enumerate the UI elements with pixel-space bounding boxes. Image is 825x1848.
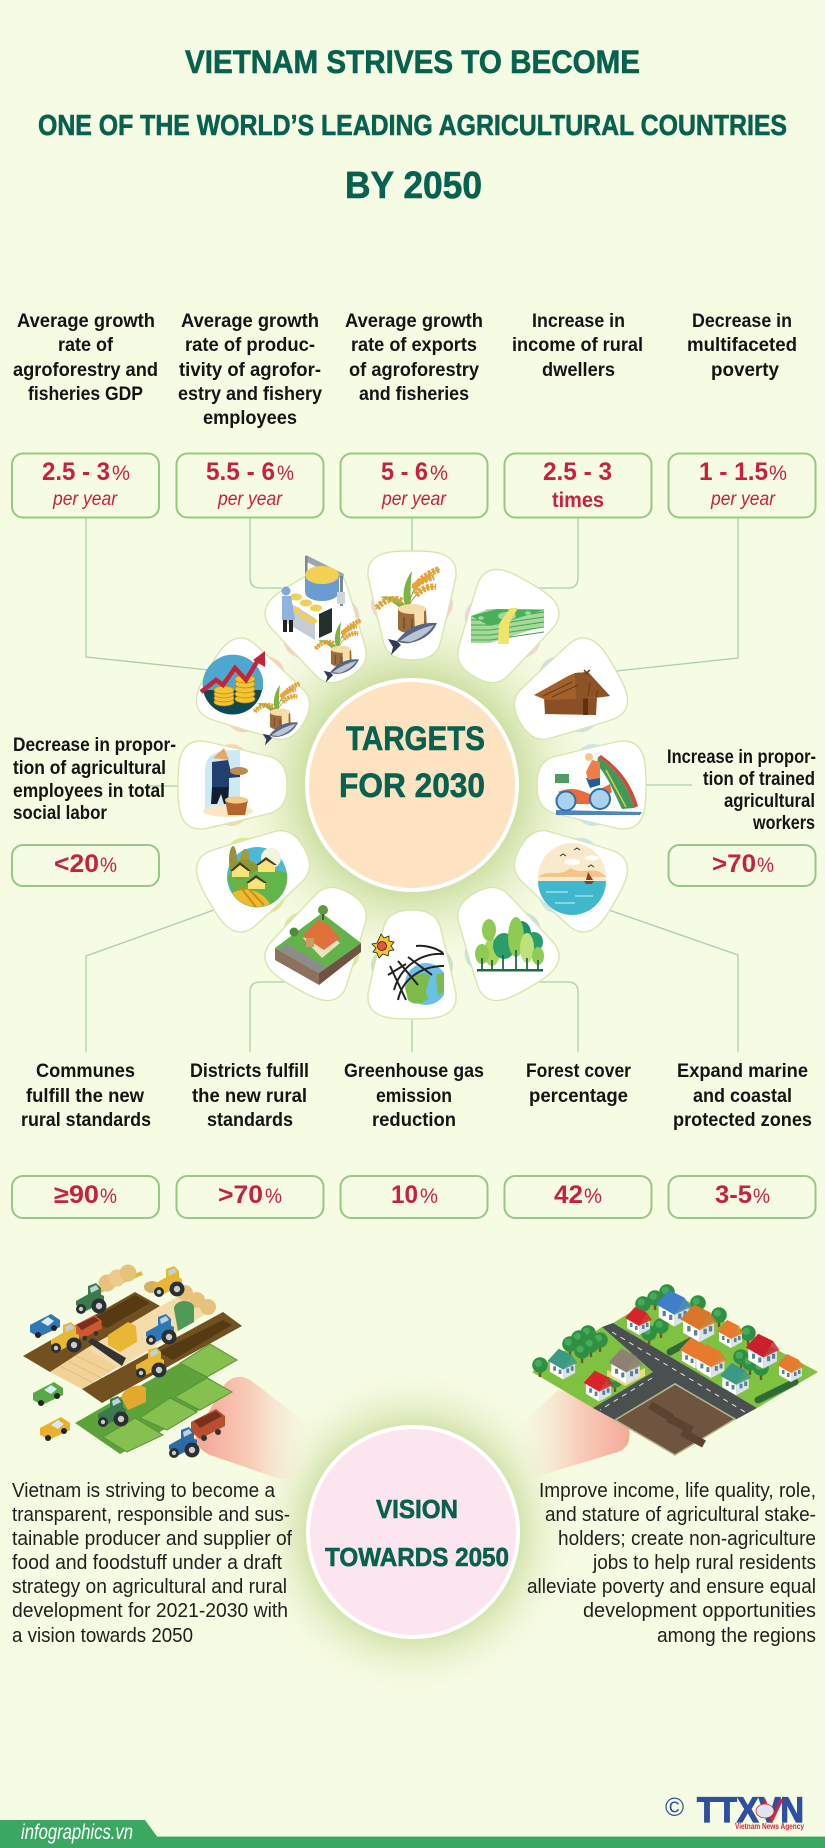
text block: vision left: food and foodstuff under a draft bbox=[12, 1552, 282, 1574]
title: VIETNAM STRIVES TO BECOME bbox=[185, 44, 640, 80]
target 2: productivity growth: per year bbox=[217, 489, 283, 510]
target 4: rural income: dwellers bbox=[542, 359, 615, 381]
footer band bbox=[0, 1820, 825, 1848]
target 5: poverty: Decrease in bbox=[692, 310, 792, 332]
icon: sea and coast bbox=[538, 843, 606, 915]
target 8: communes: ≥90 bbox=[54, 1181, 99, 1209]
target 6: agricultural employees share: tion of agricultural bbox=[13, 757, 166, 779]
icon: motorbike with woven fan bbox=[555, 753, 642, 815]
target 1: GDP growth: per year bbox=[52, 489, 118, 510]
text block: vision right: alleviate poverty and ensure equal bbox=[527, 1576, 816, 1598]
target 9: districts: Districts fulfill bbox=[190, 1060, 309, 1082]
target 11: forest cover: % bbox=[584, 1185, 602, 1208]
target 8: communes: Communes bbox=[36, 1060, 135, 1082]
text block: vision left: a vision towards 2050 bbox=[12, 1625, 193, 1647]
target 10: greenhouse gas: emission bbox=[376, 1085, 452, 1107]
logo: TTXVN Vietnam News Agency: Vietnam News Agency bbox=[735, 1821, 804, 1831]
target 2: productivity growth: 5.5 - 6 bbox=[206, 458, 275, 486]
text block: vision right: jobs to help rural residents bbox=[592, 1552, 816, 1574]
target 10: greenhouse gas: 10 bbox=[391, 1181, 418, 1209]
title bbox=[38, 44, 787, 207]
target 5: poverty: per year bbox=[710, 489, 776, 510]
icon: thatched hut bbox=[534, 670, 610, 715]
icon: forest bbox=[475, 917, 544, 972]
text block: vision right: holders; create non-agriculture bbox=[558, 1528, 816, 1550]
target 2: productivity growth: rate of produc- bbox=[185, 334, 315, 356]
arrow: peach beam right bbox=[518, 1390, 630, 1478]
target 9: districts: standards bbox=[207, 1109, 293, 1131]
target 11: forest cover: percentage bbox=[529, 1085, 628, 1107]
target 3: exports growth: of agroforestry bbox=[349, 359, 479, 381]
text block: vision left: tainable producer and supplier of bbox=[12, 1528, 292, 1550]
footer band: infographics.vn bbox=[21, 1821, 133, 1844]
target 10: greenhouse gas: % bbox=[420, 1185, 438, 1208]
target 4: rural income: 2.5 - 3 bbox=[543, 458, 612, 486]
target 6: agricultural employees share: employees in total bbox=[13, 780, 165, 802]
target 7: trained workers: % bbox=[757, 854, 774, 877]
icon: greenhouse gas globe bbox=[372, 934, 447, 1005]
target 3: exports growth: 5 - 6 bbox=[381, 458, 428, 486]
target 4: rural income: income of rural bbox=[512, 334, 643, 356]
text block: vision right bbox=[527, 1480, 816, 1647]
centre glow bbox=[222, 595, 602, 975]
target 3: exports growth: and fisheries bbox=[359, 383, 469, 405]
target 8: communes bbox=[12, 1060, 159, 1218]
target 3: exports growth: % bbox=[430, 462, 448, 485]
target 3: exports growth: Average growth bbox=[345, 310, 483, 332]
illustration: rural town bbox=[532, 1284, 818, 1455]
target 2: productivity growth: tivity of agrofor- bbox=[179, 359, 321, 381]
text block: vision right: Improve income, life quality, role, bbox=[539, 1480, 816, 1502]
target 5: poverty: multifaceted bbox=[687, 334, 797, 356]
target 4: rural income: Increase in bbox=[532, 310, 625, 332]
target 1: GDP growth bbox=[12, 310, 159, 518]
target 12: marine zones: Expand marine bbox=[677, 1060, 808, 1082]
target 5: poverty: % bbox=[769, 462, 787, 485]
target 5: poverty: poverty bbox=[711, 359, 779, 381]
target 12: marine zones: 3-5 bbox=[715, 1181, 752, 1209]
icon: farmer winnowing rice bbox=[203, 748, 253, 817]
target 4: rural income: times bbox=[552, 489, 604, 512]
target 6: agricultural employees share: Decrease in propor- bbox=[13, 734, 176, 756]
target 10: greenhouse gas: Greenhouse gas bbox=[344, 1060, 484, 1082]
target 8: communes: fulfill the new bbox=[26, 1085, 145, 1107]
target 5: poverty: 1 - 1.5 bbox=[699, 458, 768, 486]
icon: growth chart with coins and rice bbox=[201, 651, 300, 745]
panel: targets for 2030 bbox=[307, 680, 517, 890]
target 1: GDP growth: % bbox=[112, 462, 130, 485]
illustration: farm fields with machinery bbox=[23, 1264, 242, 1458]
connector lines bbox=[86, 518, 738, 1052]
target 1: GDP growth: fisheries GDP bbox=[28, 383, 143, 405]
panel: targets for 2030: FOR 2030 bbox=[339, 767, 485, 805]
text block: vision right: and stature of agricultural stake- bbox=[545, 1504, 816, 1526]
target 6: agricultural employees share bbox=[12, 734, 176, 886]
target 7: trained workers bbox=[667, 746, 816, 886]
target 9: districts: the new rural bbox=[192, 1085, 307, 1107]
text block: vision right: development opportunities bbox=[583, 1600, 816, 1622]
target 6: agricultural employees share: social labor bbox=[13, 802, 107, 824]
title: BY 2050 bbox=[345, 165, 482, 207]
panel: vision towards 2050: VISION bbox=[376, 1494, 458, 1524]
target 12: marine zones: % bbox=[753, 1185, 770, 1208]
target 5: poverty bbox=[668, 310, 816, 518]
target 3: exports growth: rate of exports bbox=[351, 334, 477, 356]
text block: vision right: among the regions bbox=[657, 1625, 816, 1647]
logo: TTXVN Vietnam News Agency: TTXVN bbox=[697, 1791, 804, 1830]
vision glow bbox=[248, 1367, 578, 1697]
target 2: productivity growth: estry and fishery bbox=[178, 383, 322, 405]
icon: banknote stack bbox=[471, 608, 544, 644]
text block: vision left bbox=[12, 1480, 292, 1647]
target 3: exports growth: per year bbox=[381, 489, 447, 510]
text block: vision left: Vietnam is striving to become a bbox=[12, 1480, 276, 1502]
icon: house on plot bbox=[275, 905, 361, 985]
target 10: greenhouse gas: reduction bbox=[372, 1109, 456, 1131]
logo: TTXVN Vietnam News Agency: © bbox=[665, 1792, 684, 1822]
target 1: GDP growth: Average growth bbox=[17, 310, 155, 332]
target 2: productivity growth bbox=[176, 310, 324, 518]
target 2: productivity growth: employees bbox=[203, 407, 297, 429]
target 12: marine zones: and coastal bbox=[693, 1085, 792, 1107]
panel: vision towards 2050 bbox=[308, 1427, 518, 1637]
icon: rural village bbox=[227, 846, 287, 907]
icon: processing machine with rice bbox=[282, 555, 361, 682]
panel: targets for 2030: TARGETS bbox=[346, 720, 485, 758]
target 8: communes: % bbox=[100, 1185, 117, 1208]
target 6: agricultural employees share: % bbox=[100, 854, 117, 877]
target 1: GDP growth: rate of bbox=[58, 334, 113, 356]
target 10: greenhouse gas bbox=[340, 1060, 488, 1218]
target 12: marine zones bbox=[668, 1060, 816, 1218]
arrow: peach beam left bbox=[196, 1377, 310, 1479]
target 7: trained workers: >70 bbox=[712, 850, 756, 878]
text block: vision left: strategy on agricultural and rural bbox=[12, 1576, 287, 1598]
target 2: productivity growth: Average growth bbox=[181, 310, 319, 332]
target 6: agricultural employees share: <20 bbox=[54, 850, 99, 878]
target 11: forest cover: 42 bbox=[554, 1181, 583, 1209]
target 12: marine zones: protected zones bbox=[673, 1109, 812, 1131]
target 9: districts bbox=[176, 1060, 324, 1218]
text block: vision left: transparent, responsible and sus- bbox=[12, 1504, 290, 1526]
target 9: districts: % bbox=[265, 1185, 282, 1208]
target 9: districts: >70 bbox=[218, 1181, 263, 1209]
panel: vision towards 2050: TOWARDS 2050 bbox=[325, 1542, 509, 1572]
target 3: exports growth bbox=[340, 310, 488, 518]
text block: vision left: development for 2021-2030 with bbox=[12, 1600, 288, 1622]
target 1: GDP growth: 2.5 - 3 bbox=[42, 458, 110, 486]
target 2: productivity growth: % bbox=[277, 462, 294, 485]
target 1: GDP growth: agroforestry and bbox=[13, 359, 158, 381]
target 8: communes: rural standards bbox=[21, 1109, 151, 1131]
petal ring bbox=[178, 551, 646, 1019]
target 11: forest cover bbox=[504, 1060, 652, 1218]
target 11: forest cover: Forest cover bbox=[526, 1060, 631, 1082]
target 4: rural income bbox=[504, 310, 652, 518]
icon: rice, timber and fish bbox=[376, 569, 440, 655]
